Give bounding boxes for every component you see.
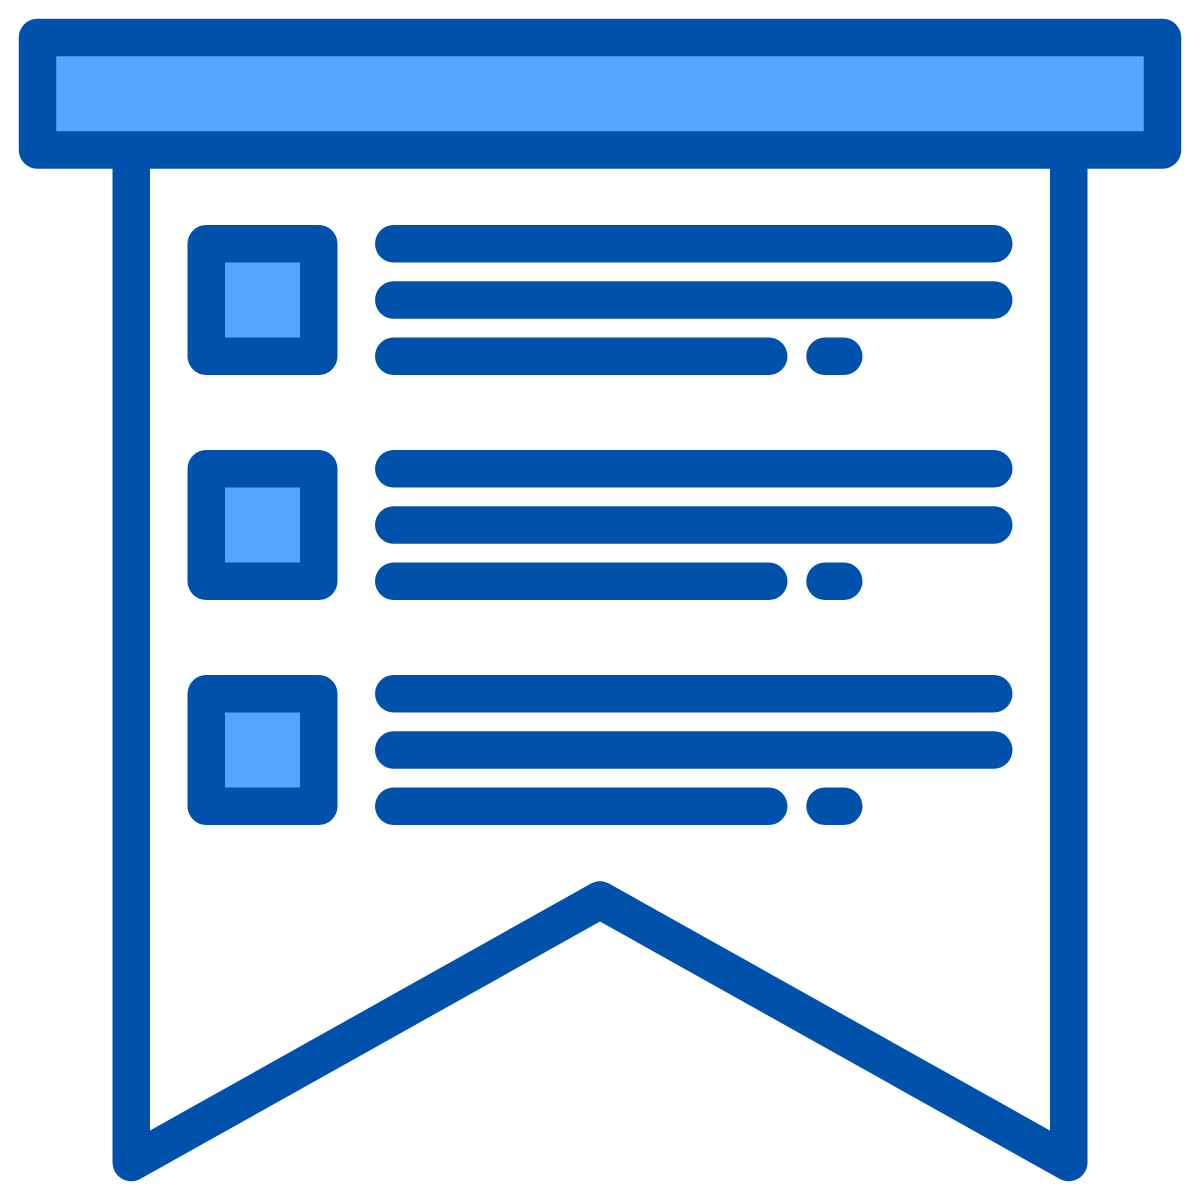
- banner body: [131, 150, 1069, 1162]
- list item 3: [206, 694, 994, 806]
- list item 1: [206, 244, 994, 356]
- top bar: [38, 38, 1162, 150]
- list item 2: [206, 469, 994, 581]
